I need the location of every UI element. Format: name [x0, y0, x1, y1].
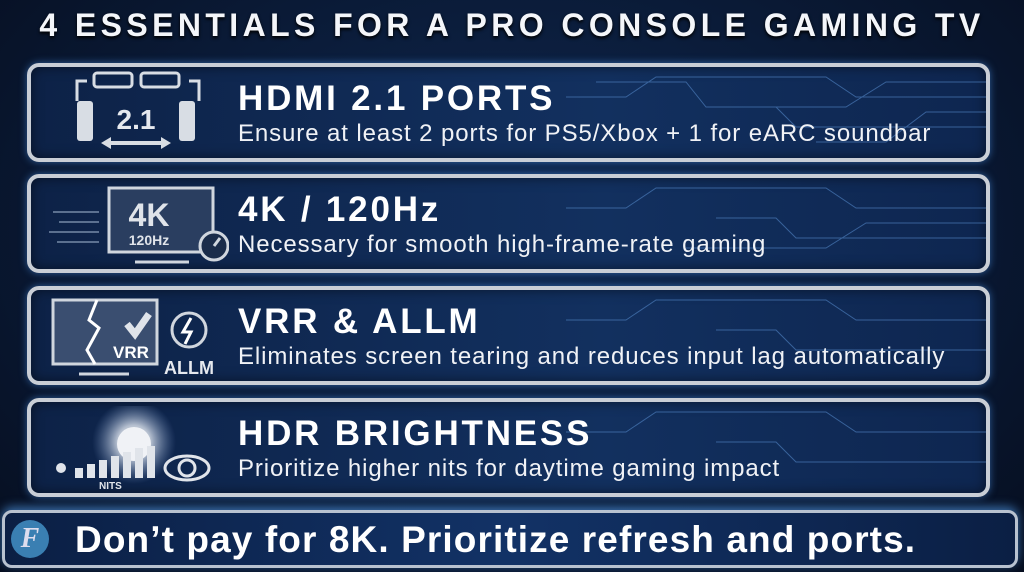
icon: sun, nits meter, eye [56, 406, 210, 490]
panel: HDMI 2.1: Ensure at least 2 ports for PS5/Xbox + 1 for eARC soundbar [238, 120, 931, 147]
bottom banner [2, 510, 1018, 568]
icon: VRR ALLM [52, 298, 214, 378]
panel: HDR brightness [27, 398, 990, 497]
icon: logo [11, 520, 49, 558]
panel: HDMI 2.1: HDMI 2.1 PORTS [238, 79, 555, 118]
icon: logo: F [21, 523, 39, 554]
panel: VRR & ALLM: Eliminates screen tearing and reduces input lag automatically [238, 343, 945, 370]
panel: 4K 120Hz: Necessary for smooth high-frame-rate gaming [238, 231, 766, 258]
title: 4 ESSENTIALS FOR A PRO CONSOLE GAMING TV [39, 7, 985, 43]
panel: 4K 120Hz: 4K / 120Hz [238, 190, 441, 229]
icon: hdmi cables: 2.1 [117, 104, 155, 135]
icon: hdmi cables [76, 72, 200, 149]
panel: VRR & ALLM: VRR & ALLM [238, 302, 481, 341]
panel: HDMI 2.1 [27, 63, 990, 162]
panel: 4K 120Hz [27, 174, 990, 273]
icon: VRR ALLM: VRR [113, 343, 149, 362]
banner text: Don’t pay for 8K. Prioritize refresh and ports. [75, 519, 916, 560]
icon: 4K monitor with stopwatch: 120Hz [129, 232, 169, 248]
panel: HDR brightness: Prioritize higher nits for daytime gaming impact [238, 455, 780, 482]
panel: VRR & ALLM [27, 286, 990, 385]
icon: VRR ALLM: ALLM [164, 358, 214, 378]
icon: 4K monitor with stopwatch: 4K [129, 197, 169, 233]
icon: 4K monitor with stopwatch [49, 186, 229, 264]
panel: HDR brightness: HDR BRIGHTNESS [238, 414, 592, 453]
